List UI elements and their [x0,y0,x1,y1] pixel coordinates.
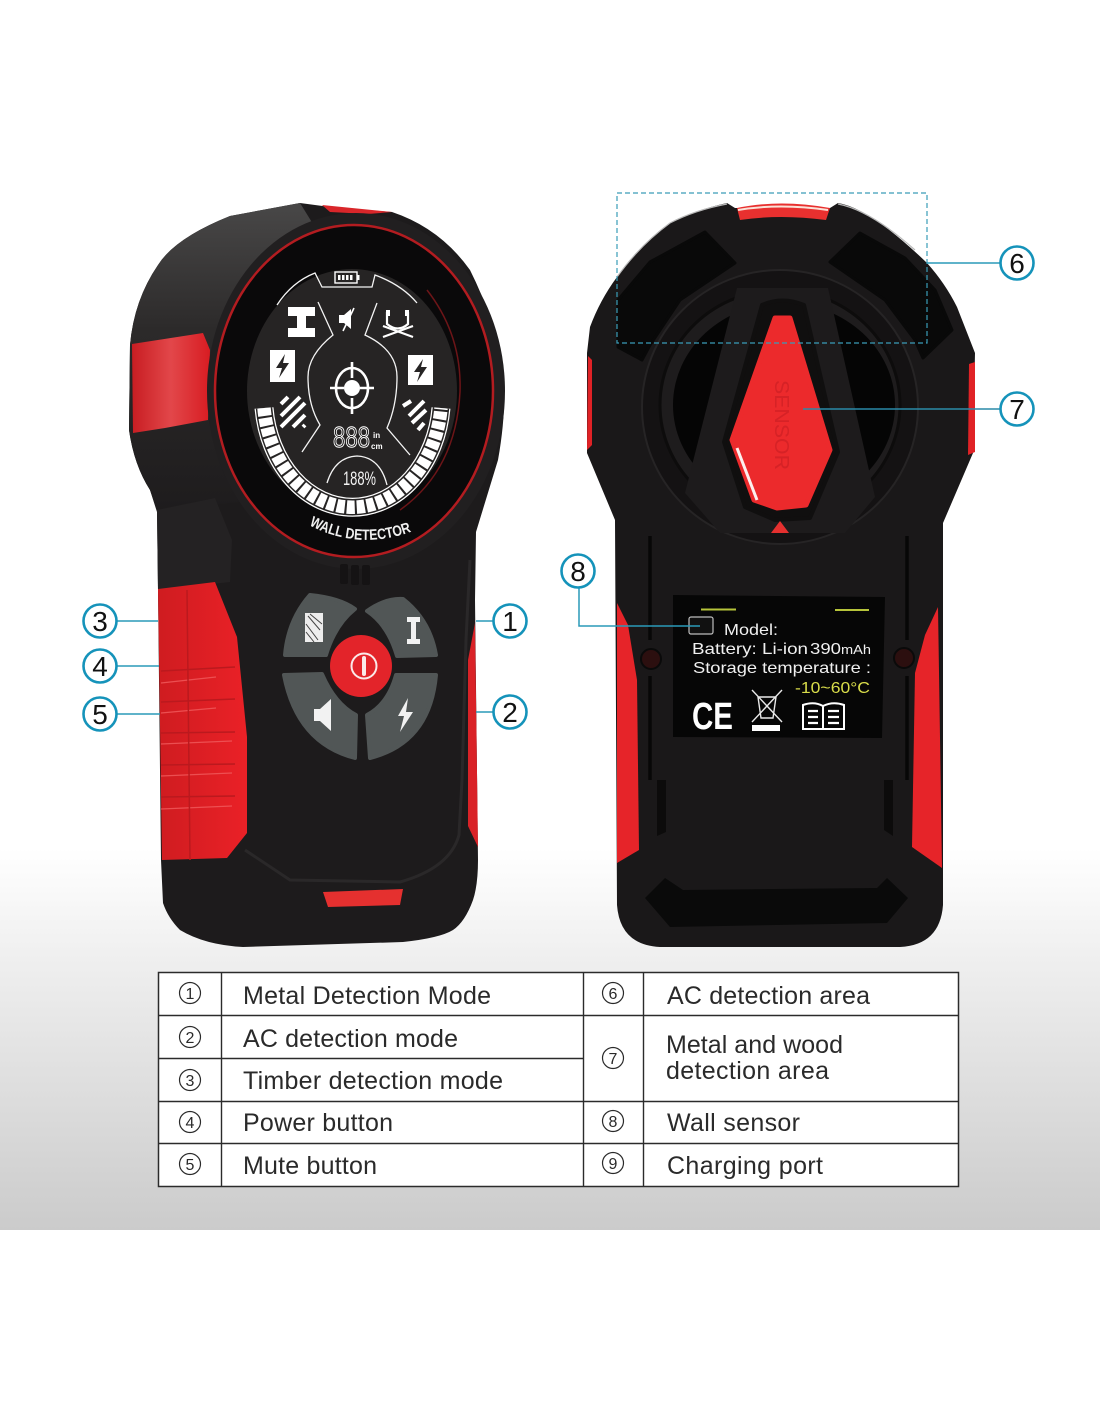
mute button [284,674,356,758]
red bottom indicator [323,889,403,907]
sensor disc [642,270,918,544]
row 5: Mute button [243,1152,377,1180]
left lightning square [270,350,295,382]
left red rear grip [617,603,639,863]
device: front view [129,203,505,947]
velcro strip [645,878,908,927]
wall detector label: WALL DETECTOR [311,516,412,540]
red top edge [737,204,830,220]
battery icon [335,272,360,283]
row 7 [602,1031,843,1085]
red ring [215,225,493,557]
left red edge [587,356,592,450]
row 3: 3 [186,1073,195,1090]
recycling symbol [752,690,782,731]
distance digits: cm [371,442,383,451]
magnet icon [383,310,413,337]
signal gauge [264,408,441,507]
row 8: Wall sensor [667,1109,800,1137]
right lightning square [408,355,433,385]
front face edge [245,560,470,882]
row 2: 2 [186,1030,195,1047]
rear body silhouette [587,203,975,947]
callout 3 [84,604,158,638]
hinge notches [340,564,370,585]
direction arrow [771,521,789,533]
target icon [330,362,374,414]
grip ridge shadows [161,590,235,860]
callout 8 [562,554,700,626]
row 1: Metal Detection Mode [243,982,491,1010]
table grid [158,972,958,1186]
power button [330,635,392,697]
model text: Model: [724,622,778,639]
grip ridges [161,677,232,809]
row 4: 4 [186,1115,195,1132]
row 3: Timber detection mode [243,1067,503,1095]
percent digits: 188% [343,469,376,490]
silver rim highlight [617,204,915,277]
storage text: Storage temperature : [693,660,871,677]
callout 1 [476,604,526,638]
CE mark: CE [692,696,733,738]
LCD frame lines [277,273,417,485]
left hatch square [281,397,305,427]
yellow dashes [701,608,869,611]
right slot [905,536,909,780]
right slot lower [884,780,893,836]
right screw [894,648,914,668]
specification label [673,595,885,738]
callout 3: 3 [92,606,108,637]
callout 4 [84,650,159,682]
mute icon [339,308,354,331]
right red edge [968,362,975,455]
callout 5: 5 [92,699,108,730]
callout 6: 6 [1009,248,1025,279]
right velcro pad [830,233,952,358]
callout 7: 7 [1009,394,1025,425]
row 9: Charging port [667,1152,823,1180]
callout 2: 2 [502,697,518,728]
distance digits: in [373,431,380,440]
callout 5 [84,698,160,730]
callout 4: 4 [92,651,108,682]
dashed AC detection area [617,193,927,343]
row 9: 9 [609,1156,618,1173]
row 7: detection area [666,1057,829,1085]
button cluster [284,595,436,758]
row 5 [180,1152,377,1180]
red top edge [322,205,392,214]
battery text: 390 [810,641,841,658]
battery text: mAh [841,642,871,657]
red side insert upper [132,333,210,433]
red sensor diamond [732,318,830,508]
left red grip [158,582,247,860]
row 8: 8 [609,1114,618,1131]
callout 8: 8 [570,556,586,587]
bezel [207,213,505,569]
battery text [692,641,871,658]
LCD screen [247,269,457,513]
manual book icon [803,703,844,729]
left slot [648,536,652,780]
left velcro pad [618,232,735,360]
front body silhouette [129,203,504,947]
row 5: 5 [186,1157,195,1174]
fin inner channel [724,300,838,520]
temperature text: -10~60°C [795,680,870,697]
right red rear grip [912,607,942,868]
battery text: Battery: Li-ion [692,641,808,658]
row 8 [602,1109,800,1137]
row 7: Metal and wood [666,1031,843,1059]
sensor lens ring [660,290,900,520]
row 6: AC detection area [667,982,870,1010]
device: rear view [587,203,975,947]
sensor lens [673,303,895,507]
callout 6 [927,246,1034,280]
metal button [367,599,436,656]
ac button [367,675,436,758]
lower side panel [157,498,232,590]
row 6: 6 [609,986,618,1003]
distance digits: 888 [333,422,370,454]
row 4: Power button [243,1109,393,1137]
callout 2 [476,696,526,728]
row 7: 7 [609,1051,618,1068]
head side shading [129,203,360,510]
inner red crescent [400,290,460,510]
row 2: AC detection mode [243,1025,458,1053]
legend table [158,972,958,1186]
red sensor diamond: SENSOR [770,380,792,470]
callout 7 [803,392,1034,426]
callout 1: 1 [502,606,518,637]
red top highlight [738,206,828,210]
right red strip [468,623,478,847]
left screw [641,649,661,669]
right hatch shape [403,401,426,430]
row 1: 1 [186,986,195,1003]
sensor fin [685,288,875,533]
timber button [285,595,355,655]
metal beam icon [288,307,315,337]
left slot lower [657,780,666,836]
port icon [689,617,713,634]
